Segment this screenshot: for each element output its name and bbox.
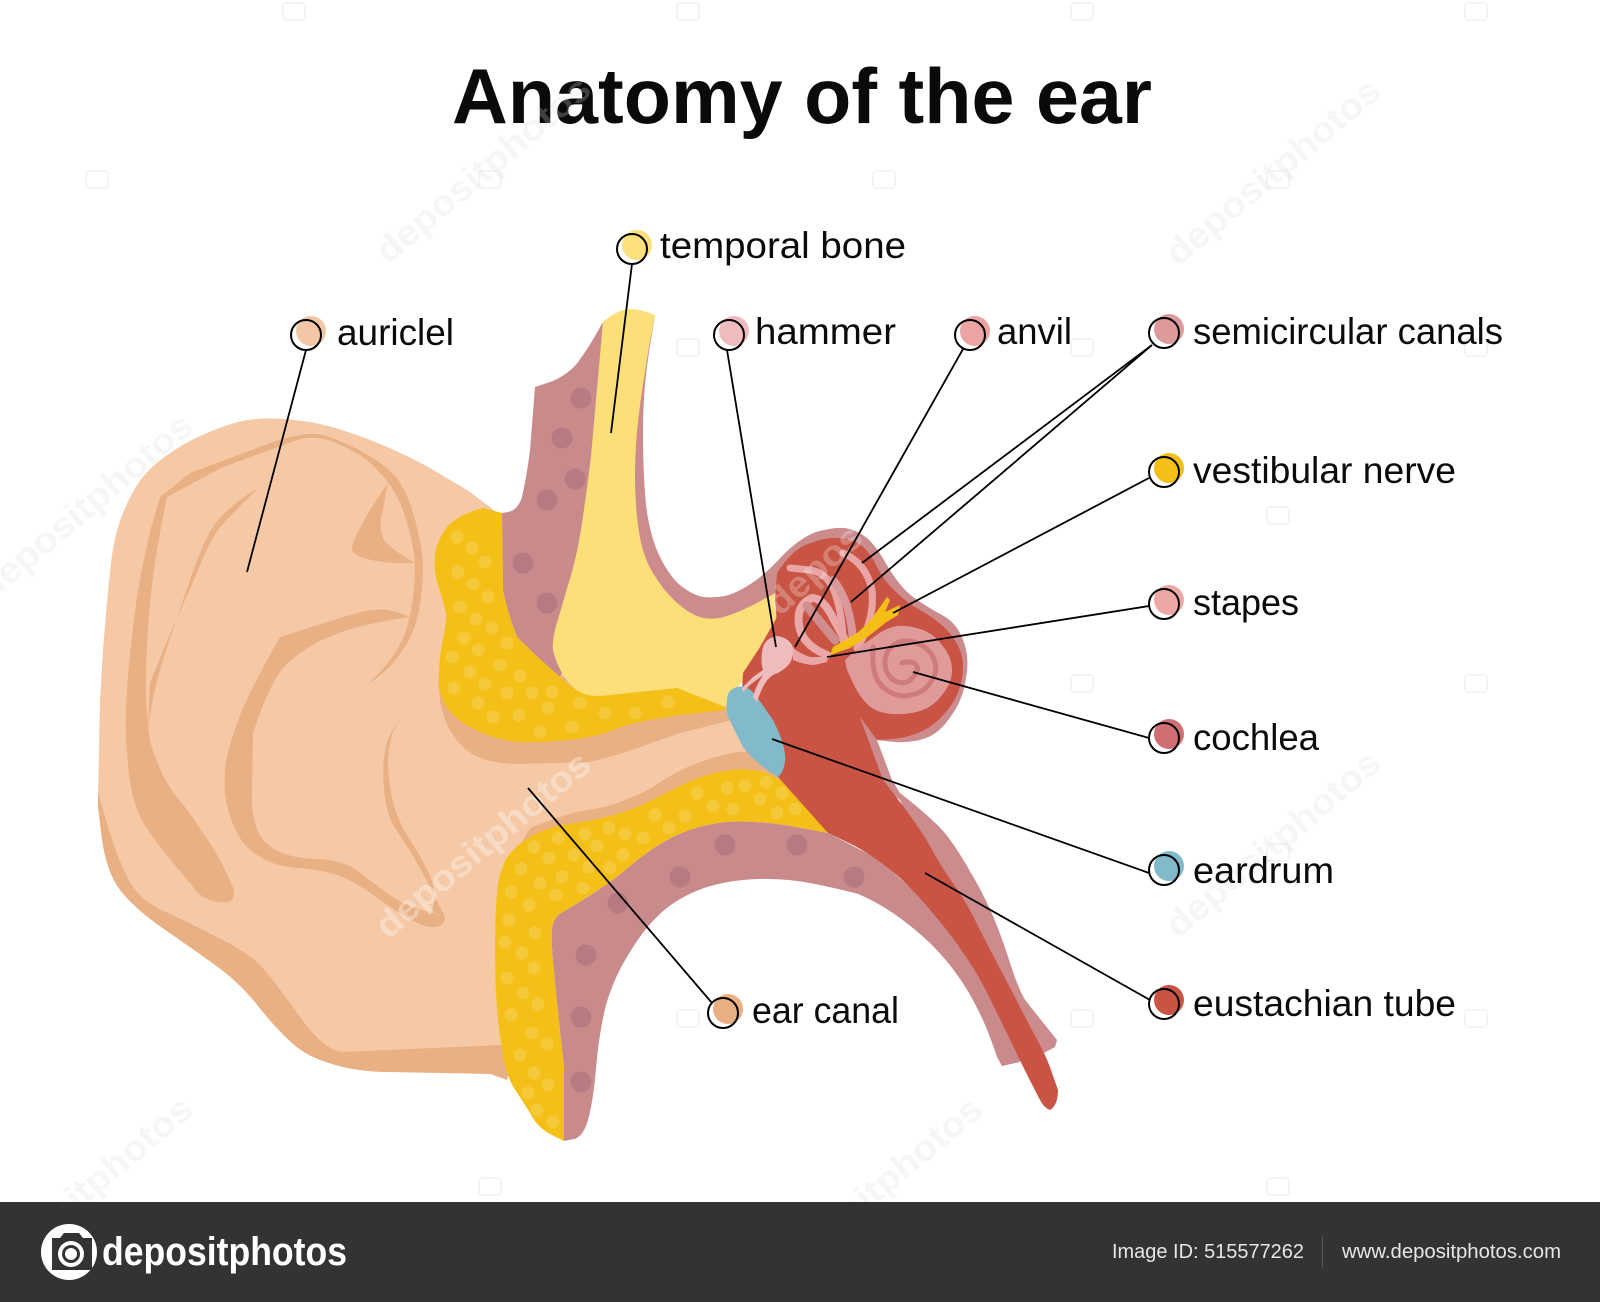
watermark: depositphotos xyxy=(758,413,985,623)
upper cartilage with dots xyxy=(434,508,725,742)
label: vestibular nerve: vestibular nerve xyxy=(1193,450,1456,491)
stapes xyxy=(793,648,828,665)
label: anvil: anvil xyxy=(997,311,1072,352)
lower cartilage with dots xyxy=(495,769,828,1141)
upper tissue with dots xyxy=(502,322,603,677)
label: ear canal xyxy=(528,788,899,1031)
ear anatomy diagram xyxy=(98,309,1058,1141)
brand name: depositphotos xyxy=(102,1230,347,1274)
lower tissue with dots xyxy=(552,822,1020,1141)
middle ear cavity and eustachian tube xyxy=(742,538,1058,1110)
website url: www.depositphotos.com xyxy=(1341,1241,1561,1263)
eardrum xyxy=(727,686,785,777)
label: cochlea: cochlea xyxy=(1193,717,1319,758)
image id: Image ID: 515577262 xyxy=(1112,1241,1304,1263)
label: stapes: stapes xyxy=(1193,582,1299,623)
ear canal lower shadow band xyxy=(520,751,790,850)
watermark: depositphotos xyxy=(1157,69,1388,273)
label: stapes xyxy=(827,582,1299,657)
title: Anatomy of the ear xyxy=(452,52,1152,140)
label: auricle xyxy=(247,312,454,572)
label: temporal bone: temporal bone xyxy=(660,225,906,266)
hammer xyxy=(742,636,793,702)
label: cochlea xyxy=(913,672,1319,758)
label: anvil xyxy=(795,311,1072,647)
tissue band around middle and inner ear xyxy=(625,315,1057,1066)
watermark: depositphotos xyxy=(367,67,598,271)
vestibular nerve xyxy=(830,597,900,655)
label: temporal bone xyxy=(611,225,906,433)
label: hammer: hammer xyxy=(755,311,896,352)
label: eustachian tube: eustachian tube xyxy=(1193,983,1456,1024)
label: auricle: auriclel xyxy=(337,312,454,353)
ear canal upper shadow band xyxy=(438,660,733,764)
footer bar xyxy=(0,1202,1600,1302)
icon: camera logo xyxy=(41,1224,97,1280)
auricle outer ear xyxy=(98,418,765,1052)
auricle outer ear shadow xyxy=(98,790,530,1080)
label: eardrum xyxy=(772,739,1334,891)
watermark: depositphotos xyxy=(1157,741,1388,945)
ear folds xyxy=(126,434,445,927)
label: semicircular canals: semicircular canals xyxy=(1193,311,1503,352)
label: ear canal: ear canal xyxy=(752,990,899,1031)
watermark: depositphotos xyxy=(759,1087,990,1291)
label: eustachian tube xyxy=(925,873,1456,1024)
temporal bone xyxy=(553,309,777,707)
cochlea xyxy=(845,626,952,714)
label: hammer xyxy=(714,311,896,647)
label: vestibular nerve xyxy=(893,450,1456,613)
semicircular canals xyxy=(790,553,872,655)
label: eardrum: eardrum xyxy=(1193,850,1334,891)
watermark: depositphotos xyxy=(367,742,598,946)
label: semicircular canals xyxy=(851,311,1503,602)
